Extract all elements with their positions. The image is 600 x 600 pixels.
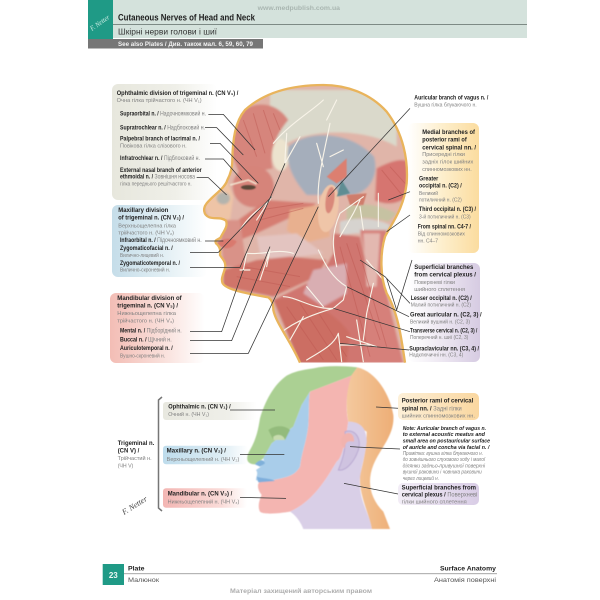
region: ophthalmic xyxy=(247,366,357,464)
page number box: 23 xyxy=(109,571,118,580)
label: buccal: Buccal n. / Щічний н. xyxy=(120,337,172,344)
nostril xyxy=(255,460,265,467)
panel: mandibular division xyxy=(110,293,205,363)
label: zygomaticofacial: Вилично-лицевий н. xyxy=(120,252,164,259)
signature: F. Netter xyxy=(119,494,150,517)
panel: posterior rami of cervical spinal nerves: шийних спинномозкових нн. xyxy=(402,412,475,419)
label: lesser occipital: Малий потиличний н. (C2) xyxy=(411,302,471,309)
label: transverse cervical xyxy=(410,329,478,341)
panel: superficial branches from cervical plexus xyxy=(408,263,482,362)
panel: medial branches of posterior rami xyxy=(408,123,479,253)
panel: ophthalmic nerve: Очний н. (ЧН V₁) xyxy=(168,411,209,418)
label: greater occipital: occipital n. (C2) / xyxy=(419,184,462,190)
panel: maxillary nerve: Верхньощелепний н. (ЧН V₂) xyxy=(167,456,240,463)
label: external nasal branch: гілка переднього решітчастого н. xyxy=(120,182,192,188)
panel: maxillary division: Верхньощелепна гілка xyxy=(118,223,176,229)
panel: medial branches of posterior rami: cervical spinal nn. / xyxy=(422,145,476,151)
panel: maxillary division: of trigeminal n. (CN V₂) / xyxy=(118,215,184,221)
panel: medial branches of posterior rami: Присередні гілки xyxy=(422,152,465,158)
header signature: F. Netter xyxy=(88,13,111,33)
label: greater occipital: Великий xyxy=(419,190,438,197)
label: lesser occipital xyxy=(411,296,472,309)
label: infraorbital: Infraorbital n. / Підочноямковий н. xyxy=(120,237,202,244)
panel: maxillary nerve xyxy=(163,446,248,464)
title translation: Шкірні нерви голови і шиї xyxy=(118,26,218,36)
label: zygomaticotemporal: Вилично-скроневий н. xyxy=(120,267,170,274)
label: from spinal nerves: нн. C4–7 xyxy=(418,238,438,244)
label: transverse cervical: Поперечний н. шиї (C2, 3) xyxy=(410,334,468,341)
illustration: dermatome head map xyxy=(230,366,400,529)
panel: superficial branches, lower: гілки шийного сплетення xyxy=(402,498,467,505)
panel: mandibular nerve xyxy=(163,488,247,508)
label: trigeminal nerve: (CN V) / xyxy=(118,448,140,454)
leader lines xyxy=(230,407,400,498)
label: third occipital: Third occipital n. (C3) / xyxy=(419,207,476,213)
region: posterior rami xyxy=(347,367,393,529)
label: zygomaticotemporal: Zygomaticotemporal n. / xyxy=(120,261,180,267)
label: supraclavicular: Надключичні нн. (C3, 4) xyxy=(409,353,463,359)
label: auricular branch of vagus xyxy=(414,95,489,109)
panel: superficial branches, lower: cervical plexus / Поверхневі xyxy=(402,492,477,498)
region: mandibular xyxy=(258,376,352,514)
label: great auricular: Great auricular n. (C2, 3) / xyxy=(410,313,482,319)
label: external nasal branch: ethmoidal n. / Зовнішня носова xyxy=(120,175,196,181)
panel: mandibular division: trigeminal n. (CN V₃) / xyxy=(117,303,178,309)
plate translation: Малюнок xyxy=(128,577,159,584)
title: Cutaneous Nerves of Head and Neck xyxy=(118,12,256,22)
panel: superficial branches from cervical plexus: from cervical plexus / xyxy=(414,273,476,279)
label: supraclavicular xyxy=(409,347,479,359)
label: greater occipital: Greater xyxy=(419,177,439,183)
muscle fibres xyxy=(237,110,405,360)
section translation: Анатомія поверхні xyxy=(434,576,497,584)
label: trigeminal nerve: (ЧН V) xyxy=(118,464,133,470)
region: cervical plexus xyxy=(290,422,372,529)
note: auricular branch of vagus xyxy=(403,426,491,482)
label: lesser occipital: Lesser occipital n. (C2) / xyxy=(411,296,472,302)
leader lines xyxy=(190,108,412,353)
lip xyxy=(257,477,275,482)
panel: maxillary division: трійчастого н. (ЧН V₂) xyxy=(118,230,174,237)
label: third occipital: 3-й потиличний н. (C3) xyxy=(419,213,471,220)
label: from spinal nerves: Від спинномозкових xyxy=(418,232,465,238)
eye and brow xyxy=(268,426,290,440)
panel: posterior rami of cervical spinal nerves: spinal nn. / Задні гілки xyxy=(402,407,462,413)
panel: ophthalmic division: Очна гілка трійчастого н. (ЧН V₁) xyxy=(117,97,202,104)
label: auricular branch of vagus: Вушна гілка блукаючого н. xyxy=(414,103,477,109)
label: greater occipital xyxy=(419,177,462,204)
note: auricular branch of vagus: до зовнішнього слухового ходу і малої xyxy=(403,457,486,463)
page number box xyxy=(103,564,124,585)
label: supraorbital: Supraorbital n. / Надочноямковий н. xyxy=(120,111,206,118)
head outline xyxy=(204,85,407,363)
panel: medial branches of posterior rami: спинномозкових нн. xyxy=(422,167,472,173)
label: supraclavicular: Supraclavicular nn. (C3, 4) / xyxy=(409,347,479,353)
label: great auricular: Великий вушний н. (C2, 3) xyxy=(410,318,470,325)
note: auricular branch of vagus: Note: Auricular branch of vagus n. xyxy=(403,426,486,432)
label: auriculotemporal xyxy=(120,346,173,359)
panel: ophthalmic nerve: Ophthalmic n. (CN V₁) / xyxy=(168,404,231,410)
ear xyxy=(338,431,359,470)
panel: posterior rami of cervical spinal nerves xyxy=(398,393,479,420)
panel: maxillary nerve: Maxillary n. (CN V₂) / xyxy=(167,448,226,454)
label: auriculotemporal: Вушно-скроневий н. xyxy=(120,352,165,359)
label: from spinal nerves xyxy=(418,224,471,244)
note: auricular branch of vagus: вушної раковини і човника раковини xyxy=(403,469,482,475)
label: auriculotemporal: Auriculotemporal n. / xyxy=(120,346,173,352)
panel: ophthalmic division: Ophthalmic division of trigeminal n. (CN V₁) / xyxy=(117,91,239,97)
note: auricular branch of vagus: через лицевий н. xyxy=(403,475,439,482)
label: trigeminal nerve xyxy=(118,441,155,470)
label: zygomaticofacial: Zygomaticofacial n. / xyxy=(120,246,173,252)
illustration: dissected head and neck xyxy=(190,80,417,367)
label: palpebral branch: Palpebral branch of lacrimal n. / xyxy=(120,137,200,143)
panel: mandibular nerve: Нижньощелепний н. (ЧН V₃) xyxy=(168,499,240,506)
label: auricular branch of vagus: Auricular branch of vagus n. / xyxy=(414,95,489,101)
panel: superficial branches from cervical plexus: Поверхневі гілки xyxy=(414,280,455,286)
panel: ophthalmic division xyxy=(112,84,239,200)
label: from spinal nerves: From spinal nn. C4-7 / xyxy=(418,224,471,230)
plate label: Plate xyxy=(128,566,145,572)
footer xyxy=(103,564,497,595)
label: third occipital xyxy=(419,207,476,220)
label: great auricular xyxy=(410,313,482,325)
label: zygomaticofacial xyxy=(120,246,173,259)
note: auricular branch of vagus: to external acoustic meatus and xyxy=(403,432,486,438)
website address: www.medpublish.com.ua xyxy=(257,5,340,12)
panel: mandibular division: Нижньощелепна гілка xyxy=(117,311,176,317)
label: external nasal branch xyxy=(120,168,202,188)
header band xyxy=(88,0,527,48)
note: auricular branch of vagus: small area on postauricular surface xyxy=(403,438,490,444)
panel: superficial branches, lower: Superficial branches from xyxy=(402,485,476,491)
label: greater occipital: потиличний н. (C2) xyxy=(419,197,462,204)
label: palpebral branch: Повікова гілка слізового н. xyxy=(120,144,187,150)
panel: superficial branches from cervical plexus: Superficial branches xyxy=(414,265,474,271)
panel: superficial branches, lower xyxy=(398,483,479,505)
bracket: trigeminal nerve xyxy=(158,397,162,511)
panel: superficial branches from cervical plexus: шийного сплетення xyxy=(414,286,465,293)
label: trigeminal nerve: Трійчастий н. xyxy=(118,455,152,462)
label: supratrochlear: Supratrochlear n. / Надблоковий н. xyxy=(120,124,205,131)
label: mental: Mental n. / Підборідний н. xyxy=(120,328,182,335)
panel: ophthalmic nerve xyxy=(163,402,257,420)
panel: posterior rami of cervical spinal nerves: Posterior rami of cervical xyxy=(402,398,474,404)
label: external nasal branch: External nasal branch of anterior xyxy=(120,168,202,174)
label: infratrochlear: Infratrochlear n. / Підблоковий н. xyxy=(120,155,200,162)
panel: medial branches of posterior rami: Medial branches of xyxy=(422,130,476,136)
section title: Surface Anatomy xyxy=(440,566,496,572)
region: maxillary xyxy=(256,392,310,482)
nerve branches xyxy=(240,100,383,362)
label: transverse cervical: Transverse cervical n. (C2, 3) / xyxy=(410,329,478,335)
label: trigeminal nerve: Trigeminal n. xyxy=(118,441,155,447)
panel: medial branches of posterior rami: задніх гілок шийних xyxy=(422,158,474,165)
label: zygomaticotemporal xyxy=(120,261,180,274)
panel: mandibular division: трійчастого н. (ЧН V₃) xyxy=(117,317,174,324)
panel: medial branches of posterior rami: posterior rami of xyxy=(422,138,468,144)
panel: maxillary division xyxy=(112,205,207,277)
see also plates: See also Plates / Див. також мал. 6, 59, 60, 79 xyxy=(118,42,254,48)
note: auricular branch of vagus: ділянки задньо-привушної поверхні xyxy=(403,463,486,469)
note: auricular branch of vagus: Примітка: вушна гілка блукаючого н. xyxy=(403,451,483,457)
note: auricular branch of vagus: of auricle and concha via facial n. / xyxy=(403,445,491,451)
panel: mandibular division: Mandibular division of xyxy=(117,296,183,302)
label: palpebral branch xyxy=(120,137,200,150)
panel: maxillary division: Maxillary division xyxy=(118,208,169,214)
copyright line: Матеріал захищений авторським правом xyxy=(230,588,372,595)
panel: mandibular nerve: Mandibular n. (CN V₃) / xyxy=(168,492,233,498)
